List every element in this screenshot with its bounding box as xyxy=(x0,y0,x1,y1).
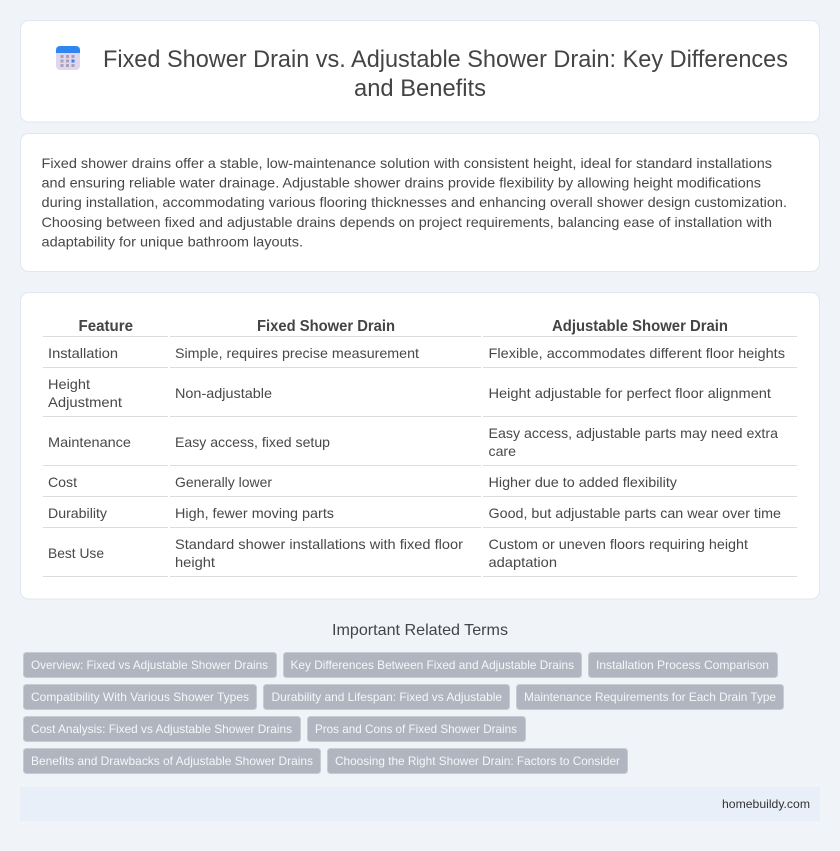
row: durability xyxy=(48,505,781,521)
tags row 4: Choosing the Right Shower Drain: Factors to Consider xyxy=(335,754,620,768)
row: durability: Good, but adjustable parts can wear over time xyxy=(488,505,781,521)
row: maintenance: Easy access, fixed setup xyxy=(175,434,330,450)
footer: homebuildy.com xyxy=(722,797,810,811)
heading: and Benefits xyxy=(354,75,486,102)
related terms heading: Important Related Terms xyxy=(332,622,508,639)
row: best use: Standard shower installations with fixed floor xyxy=(175,536,463,552)
table header: Fixed Shower Drain xyxy=(257,318,395,335)
tags row 3 xyxy=(24,716,526,742)
intro text block: adaptability for unique bathroom layouts. xyxy=(42,233,303,249)
row: installation: Installation xyxy=(48,345,118,361)
row: height adjustment xyxy=(48,376,771,410)
table header: Adjustable Shower Drain xyxy=(552,318,728,335)
intro text block xyxy=(42,155,787,249)
tags row 1: Key Differences Between Fixed and Adjustable Drains xyxy=(290,658,574,672)
tags row 2 xyxy=(24,684,784,710)
row: best use: Custom or uneven floors requiring height xyxy=(488,536,748,552)
tags row 3: Cost Analysis: Fixed vs Adjustable Shower Drains xyxy=(31,722,292,736)
row: durability: High, fewer moving parts xyxy=(175,505,334,521)
footer xyxy=(20,787,820,821)
row: cost: Higher due to added flexibility xyxy=(488,474,677,490)
row: installation xyxy=(48,345,785,361)
row: height adjustment: Non-adjustable xyxy=(175,385,272,401)
row: maintenance: Maintenance xyxy=(48,434,131,450)
row: installation: Simple, requires precise measurement xyxy=(175,345,419,361)
row: cost xyxy=(48,474,677,490)
intro text block: during installation, accommodating various flooring thicknesses and enhancing overall shower design customization. xyxy=(42,194,787,210)
table header xyxy=(78,318,728,335)
row: best use: height xyxy=(175,554,215,570)
row: height adjustment: Height xyxy=(48,376,90,392)
tags row 1: Overview: Fixed vs Adjustable Shower Drains xyxy=(31,658,268,672)
tags row 1 xyxy=(24,652,778,678)
icon: calendar xyxy=(56,46,80,70)
panel: comparison table xyxy=(20,292,820,599)
row: best use: Best Use xyxy=(48,545,104,561)
row: height adjustment: Height adjustable for perfect floor alignment xyxy=(488,385,771,401)
row: durability: Durability xyxy=(48,505,107,521)
tags row 2: Durability and Lifespan: Fixed vs Adjustable xyxy=(272,690,502,704)
row: maintenance: care xyxy=(488,443,516,459)
panel: introduction xyxy=(20,134,820,272)
tags row 4: Benefits and Drawbacks of Adjustable Shower Drains xyxy=(31,754,313,768)
row: cost: Cost xyxy=(48,474,77,490)
tags row 4 xyxy=(24,748,628,774)
panel: title xyxy=(20,20,820,122)
tags row 2: Compatibility With Various Shower Types xyxy=(31,690,249,704)
row: cost: Generally lower xyxy=(175,474,272,490)
row: maintenance xyxy=(48,425,778,459)
table header: Feature xyxy=(78,318,133,335)
heading: Fixed Shower Drain vs. Adjustable Shower Drain: Key Differences xyxy=(103,46,788,73)
row: height adjustment: Adjustment xyxy=(48,394,122,410)
tags row 3: Pros and Cons of Fixed Shower Drains xyxy=(315,722,517,736)
tags row 2: Maintenance Requirements for Each Drain Type xyxy=(524,690,776,704)
row: best use: adaptation xyxy=(488,554,557,570)
intro text block: and ensuring reliable water drainage. Adjustable shower drains provide flexibility by allowing height modifications xyxy=(42,175,761,191)
tags row 1: Installation Process Comparison xyxy=(596,658,769,672)
heading xyxy=(103,46,788,102)
row: maintenance: Easy access, adjustable parts may need extra xyxy=(488,425,778,441)
row: best use xyxy=(48,536,748,570)
row: installation: Flexible, accommodates different floor heights xyxy=(488,345,785,361)
intro text block: Choosing between fixed and adjustable drains depends on project requirements, balancing ease of installation with xyxy=(42,214,772,230)
intro text block: Fixed shower drains offer a stable, low-maintenance solution with consistent height, ideal for standard installations xyxy=(42,155,772,171)
section: important related terms xyxy=(24,622,784,774)
